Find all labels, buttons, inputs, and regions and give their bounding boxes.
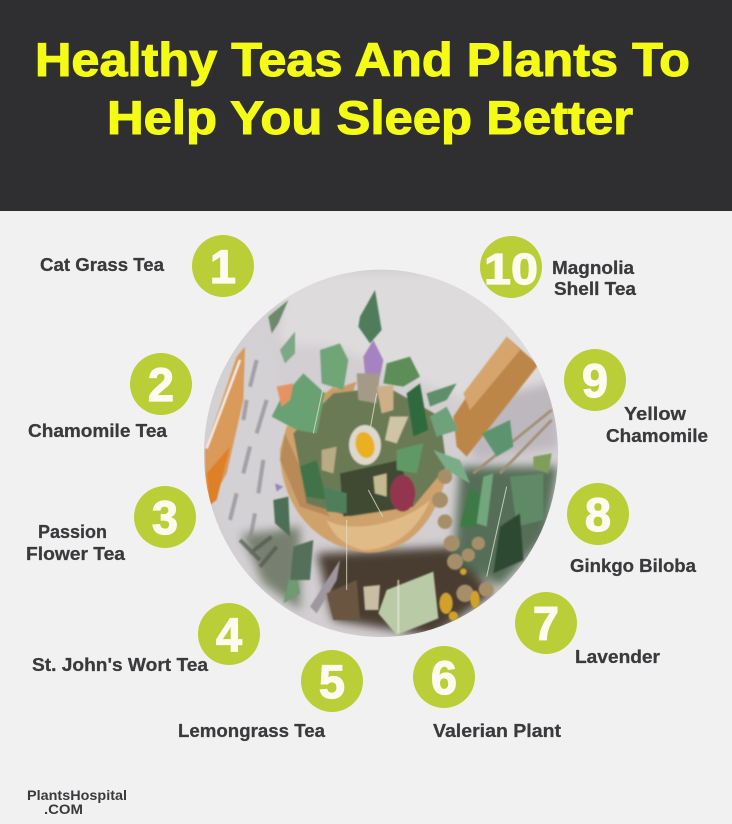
badge 3: 3 [152, 491, 178, 544]
pale leaf at bottom [378, 572, 438, 635]
title: Help You Sleep Better [107, 91, 633, 144]
title: Healthy Teas And Plants To [35, 33, 690, 86]
badge 7: 7 [533, 597, 559, 650]
inner herbs [293, 387, 447, 517]
badge 10 [480, 236, 542, 298]
label 10: Magnolia [552, 258, 635, 278]
badge 5: 5 [319, 655, 345, 708]
circular photo: dried herbs in wooden spoon [200, 260, 570, 650]
watermark [27, 787, 127, 817]
badge 9: 9 [582, 354, 608, 407]
title [35, 33, 690, 144]
label 9 [606, 404, 708, 446]
label 7: Lavender [575, 647, 660, 667]
label 3 [26, 522, 126, 564]
badge 2 [130, 353, 192, 415]
badge 3 [134, 486, 196, 548]
spoon handle [453, 337, 538, 457]
label 3: Flower Tea [26, 544, 126, 564]
badge 7 [515, 592, 577, 654]
lavender and lower dark herbs [275, 483, 283, 492]
badge 10: 10 [484, 245, 538, 294]
peach petal [277, 383, 293, 407]
grass stems [313, 387, 507, 590]
badge 6: 6 [431, 651, 457, 704]
twigs [473, 410, 552, 473]
number badges [130, 235, 629, 712]
chamomile buds [432, 469, 493, 602]
watermark: PlantsHospital [27, 787, 127, 803]
label 8: Ginkgo Biloba [570, 556, 697, 576]
watermark: .COM [44, 801, 83, 817]
badge 2: 2 [148, 358, 174, 411]
badge 1: 1 [210, 240, 236, 293]
label 4: St. John's Wort Tea [32, 655, 209, 675]
label 5: Lemongrass Tea [178, 721, 326, 741]
spoon bowl [280, 387, 448, 553]
label 1: Cat Grass Tea [40, 255, 165, 275]
badge 8: 8 [585, 488, 611, 541]
header banner [0, 0, 732, 211]
green leaves [272, 373, 325, 433]
label 9: Chamomile [606, 426, 708, 446]
labels [26, 255, 708, 741]
label 3: Passion [38, 522, 107, 542]
badge 5 [301, 650, 363, 712]
badge 1 [192, 235, 254, 297]
badge 8 [567, 483, 629, 545]
label 10 [552, 258, 637, 299]
badge 6 [413, 646, 475, 708]
label 10: Shell Tea [554, 279, 637, 299]
badge 9 [564, 349, 626, 411]
label 9: Yellow [624, 404, 687, 424]
badge 4 [198, 603, 260, 665]
flowers [363, 340, 383, 377]
jar [205, 347, 245, 503]
badge 4: 4 [216, 608, 242, 661]
label 6: Valerian Plant [433, 721, 561, 741]
label 2: Chamomile Tea [28, 421, 168, 441]
lavender streaks on cloth [230, 360, 277, 567]
